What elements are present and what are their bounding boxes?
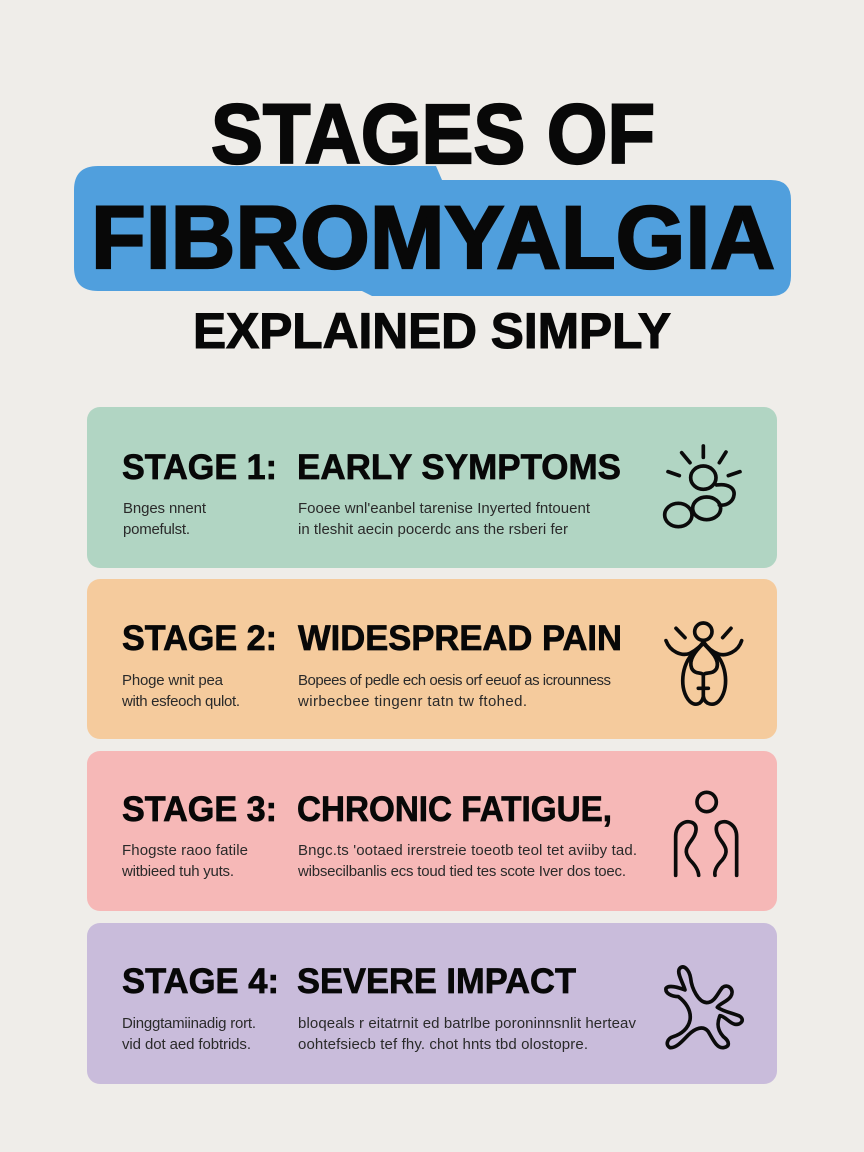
- stage 2 heading: WIDESPREAD PAIN: [298, 619, 622, 658]
- stage 4 short text: [122, 1015, 256, 1053]
- stage 3 short text: witbieed tuh yuts.: [121, 863, 234, 880]
- stage 2 description: Bopees of pedle ech oesis orf eeuof as icrounness: [298, 672, 611, 689]
- stage 3 heading: CHRONIC FATIGUE,: [297, 790, 612, 829]
- stage 2 short text: [121, 672, 240, 710]
- stage 1 description: [298, 500, 591, 538]
- stage 1 short text: pomefulst.: [123, 521, 190, 538]
- stage 4 description: oohtefsiecb tef fhy. chot hnts tbd olostopre.: [298, 1036, 588, 1053]
- title highlight: [74, 166, 791, 296]
- stage 4 short text: vid dot aed fobtrids.: [122, 1036, 251, 1053]
- panel: stage 2: [87, 579, 777, 739]
- icon: body with pain: [666, 623, 742, 704]
- stage 2 label: STAGE 2:: [122, 619, 277, 658]
- stage 1 description: Fooee wnl'eanbel tarenise Inyerted fntouent: [298, 500, 591, 517]
- title line: stages of: STAGES OF: [211, 87, 655, 181]
- title: [74, 87, 791, 359]
- subtitle: EXPLAINED SIMPLY: [193, 303, 671, 359]
- stage 2 description: wirbecbee tingenr tatn tw ftohed.: [297, 693, 527, 710]
- panel: stage 1: [87, 407, 777, 568]
- stage 4 short text: Dinggtamiinadig rort.: [122, 1015, 256, 1032]
- stage 3 description: wibsecilbanlis ecs toud tied tes scote Iver dos toec.: [297, 863, 626, 880]
- stage 1 short text: [123, 500, 207, 538]
- panel: stage 3: [87, 751, 777, 911]
- stage 4 heading: SEVERE IMPACT: [297, 962, 576, 1001]
- stage 1 label: STAGE 1:: [122, 448, 277, 487]
- stage 3 description: [297, 842, 637, 880]
- stage 2 background: [87, 579, 777, 739]
- panel: stage 4: [87, 923, 777, 1084]
- icon: sun and joints: [665, 446, 740, 527]
- title line: fibromyalgia: FIBROMYALGIA: [91, 187, 775, 287]
- icon: fatigued person: [676, 792, 737, 875]
- stage 2 short text: Phoge wnit pea: [122, 672, 224, 689]
- stage 4 description: [298, 1015, 636, 1053]
- stage 3 short text: [121, 842, 248, 880]
- icon: nerve cell: [666, 967, 742, 1048]
- stage 3 short text: Fhogste raoo fatile: [122, 842, 248, 859]
- stage 2 description: [297, 672, 611, 710]
- stage 3 background: [87, 751, 777, 911]
- stage 4 label: STAGE 4:: [122, 962, 279, 1001]
- stage 4 description: bloqeals r eitatrnit ed batrlbe poroninnsnlit herteav: [298, 1015, 636, 1032]
- stage 2 short text: with esfeoch qulot.: [121, 693, 240, 710]
- stage 1 background: [87, 407, 777, 568]
- stage 1 description: in tleshit aecin pocerdc ans the rsberi fer: [298, 521, 568, 538]
- stage 3 label: STAGE 3:: [122, 790, 277, 829]
- stage 1 short text: Bnges nnent: [123, 500, 207, 517]
- stage 3 description: Bngc.ts 'ootaed irerstreie toeotb teol tet aviiby tad.: [298, 842, 637, 859]
- stage 4 background: [87, 923, 777, 1084]
- stage 1 heading: EARLY SYMPTOMS: [297, 448, 621, 487]
